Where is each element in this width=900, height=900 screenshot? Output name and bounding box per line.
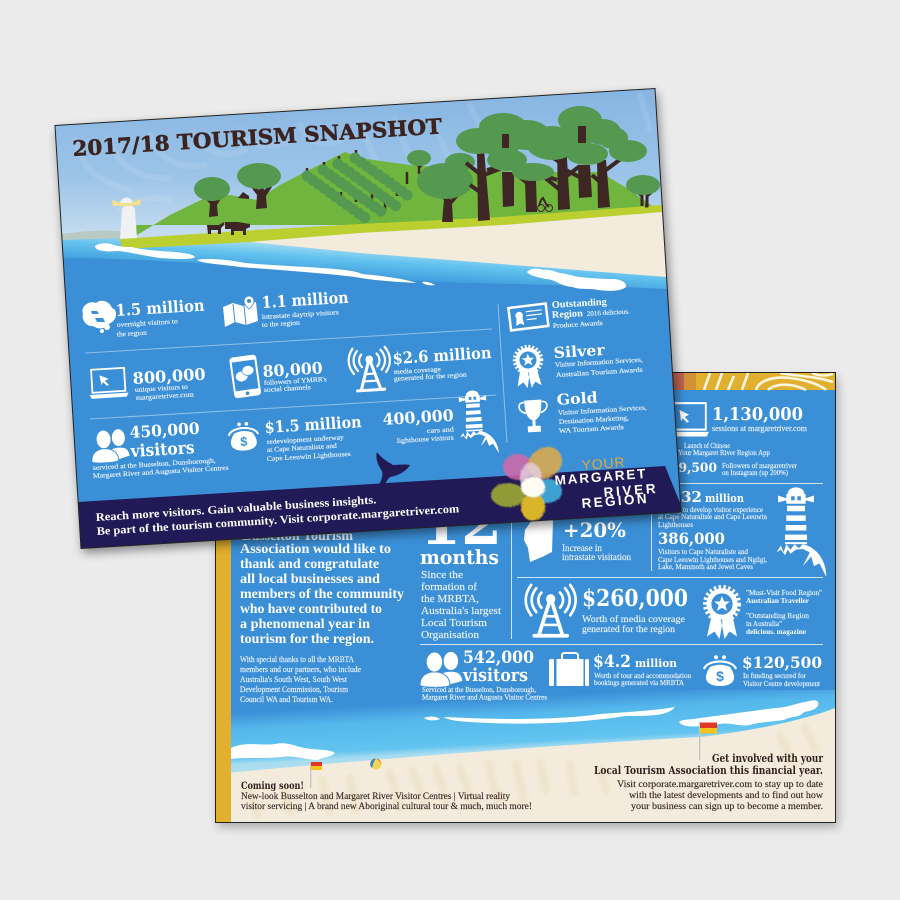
illustration: hill trees: [194, 150, 660, 222]
text: Chinese app launch: Launch of Chinese: [684, 441, 731, 450]
stat: $2.6 million: generated for the region: [394, 372, 468, 383]
stat: $4.2 million: $4.2: [593, 652, 631, 672]
award: outstanding region: Produce Awards: [553, 320, 603, 330]
foam: [197, 259, 435, 285]
gold side stripe: [216, 540, 231, 822]
icon: lighthouse: [777, 487, 826, 577]
icon: right flag: [699, 722, 717, 760]
stat: $2.6 million: media coverage: [394, 366, 441, 376]
grass strip: [120, 205, 663, 249]
text: special thanks: Australia's South West, South West: [240, 675, 348, 684]
stat: lighthouse investment: million: [705, 491, 745, 505]
stat: 1.5 million: overnight visitors to: [117, 318, 179, 329]
stat: 800,000: unique visitors to: [135, 384, 189, 394]
panel: back card: [216, 373, 835, 822]
stat: $4.2 million: [593, 652, 691, 687]
logo: wordmark: YOUR: [581, 454, 625, 473]
award: gold: [556, 388, 647, 435]
text: coming soon: New-look Busselton and Margaret River Visitor Centres | Virtual reality: [241, 792, 510, 802]
stat: 12 months: 12: [420, 485, 502, 560]
gold textured top band: [673, 373, 835, 392]
dividers: [85, 304, 507, 443]
stat: lighthouse investment: [655, 488, 767, 529]
stat: $260,000: generated for the region: [582, 624, 675, 635]
shallow water: [60, 238, 667, 289]
award: silver: Visitor Information Services,: [555, 357, 643, 369]
distant headland: [62, 230, 120, 240]
stat: 542,000 visitors: [422, 648, 547, 702]
stat: +20%: [562, 522, 631, 560]
icon: laptop: [674, 402, 709, 436]
award: outstanding region: Region: [552, 308, 584, 321]
heading: thank you message: members of the community: [240, 587, 404, 602]
illustration: vineyard: [307, 150, 410, 220]
award: silver: Australian Tourism Awards: [556, 367, 643, 379]
stat: 542,000 visitors: visitors: [462, 665, 528, 686]
text: media quotes: "Outstanding Region: [746, 611, 809, 620]
stat: $120,500: $120,500: [742, 653, 822, 672]
beach: [250, 212, 667, 277]
stat: 80,000: [262, 358, 327, 394]
stat: $4.2 million: bookings generated via MRBTA: [594, 679, 684, 687]
text: get involved: Visit corporate.margaretriver.com to stay up to date: [617, 780, 823, 790]
icon: certificate: [507, 302, 550, 332]
stat: 1.1 million: 1.1 million: [261, 288, 349, 312]
icon: beach ball: [370, 758, 382, 770]
text: media quotes: "Must-Visit Food Region": [746, 588, 822, 597]
stat: $1.5 million: at Cape Naturaliste and: [267, 443, 338, 454]
award: outstanding region: 2016 delicious.: [587, 308, 630, 318]
logo: wordmark: MARGARET: [554, 466, 647, 488]
heading: thank you message: a phenomenal year in: [240, 617, 370, 632]
stat: 12 months: Organisation: [421, 629, 480, 641]
stat: 400,000: 400,000: [382, 406, 454, 429]
heading: thank you message: all local businesses and: [240, 572, 380, 587]
icon: cloud with cars: [82, 301, 116, 333]
stat: 800,000: [132, 365, 206, 402]
stat: $120,500: Visitor Centre development: [743, 680, 820, 688]
text: media quotes: Australian Traveller: [746, 596, 810, 605]
icon: map pin: [223, 296, 258, 327]
icon: suitcase: [549, 653, 589, 686]
stat: 12 months: Local Tourism: [421, 617, 487, 629]
stat: $1.5 million: Cape Leeuwin Lighthouses: [267, 451, 351, 463]
stat: +20%: Increase in: [562, 544, 602, 554]
stat: lighthouse investment: $1.32: [655, 488, 702, 506]
stat: 12 months: [420, 524, 501, 641]
stat: 542,000 visitors: Serviced at the Busselton, Dunsborough,: [422, 686, 536, 694]
stat: 12 months: months: [420, 545, 499, 569]
stat: 450,000 visitors: serviced at the Busselton, Dunsborough,: [93, 457, 216, 472]
text: special thanks: members and our partners, who include: [240, 665, 361, 674]
panel: front card: [55, 88, 690, 560]
stat: 542,000 visitors: Margaret River and Augusta Visitor Centres: [422, 694, 547, 702]
stat: 12 months: Since the: [421, 569, 463, 581]
stat: 80,000: followers of YMRR's: [264, 376, 327, 387]
icon: smartphone: [229, 354, 261, 399]
stat: 1.5 million: 1.5 million: [115, 296, 205, 320]
stat: 400,000: [382, 406, 455, 445]
stat: 1.1 million: to the region: [262, 320, 301, 329]
text: get involved: Local Tourism Association this financial year.: [594, 764, 823, 777]
stat: 1.5 million: [115, 296, 205, 338]
illustration: cyclist: [538, 198, 552, 212]
card shadow: back: [218, 378, 838, 827]
stat: 12 months: the MRBTA,: [421, 593, 479, 605]
icon: whale tail: [376, 452, 410, 486]
stat: 450,000 visitors: 450,000: [129, 419, 200, 442]
stat: 800,000: margaretriver.com: [136, 391, 195, 402]
icon: trophy: [519, 399, 549, 433]
heading: thank you message: Busselton Tourism: [242, 529, 353, 544]
stat: $260,000: Worth of media coverage: [582, 614, 685, 625]
heading: thank you message: who have contributed to: [240, 602, 382, 617]
stat: 1.1 million: [261, 288, 349, 329]
text: media quotes: [746, 588, 822, 636]
logo: wordmark: REGION: [581, 491, 647, 511]
stat: 80,000: 80,000: [262, 358, 323, 381]
icon: award rosette: [705, 587, 739, 639]
award: outstanding region: Outstanding: [552, 297, 607, 311]
stat: lighthouse investment: Lighthouses: [658, 520, 693, 529]
stat: Instagram followers: [679, 462, 797, 477]
text: media quotes: in Australia": [746, 619, 782, 628]
foam: left: [231, 743, 335, 760]
heading: thank you message: [240, 529, 404, 647]
award: silver: Silver: [553, 341, 606, 362]
foam: [95, 243, 195, 259]
stat: $1.5 million: redevelopment underway: [267, 434, 345, 446]
stat: Instagram followers: 49,500: [670, 461, 717, 476]
blue background: [231, 390, 835, 690]
stat: 400,000: lighthouse visitors: [397, 435, 454, 445]
stat: lighthouse investment: Funding to develop visitor experience: [658, 505, 764, 514]
illustration: cows: [207, 222, 250, 235]
icon: visitors: [420, 652, 462, 687]
stat: $1.5 million: [264, 412, 362, 463]
stat: lighthouse investment: at Cape Naturaliste and Cape Leeuwin: [658, 512, 767, 521]
stat: 1.1 million: intrastate daytrip visitors: [262, 309, 339, 321]
foam: thin centre: [424, 707, 675, 724]
icon: Western Australia map: [524, 520, 553, 562]
heading: thank you message: Association would like to: [240, 542, 391, 557]
text: get involved: with the latest developments and to find out how: [629, 790, 823, 801]
stat: $260,000: [582, 585, 688, 635]
award: outstanding region: [552, 297, 630, 330]
text: get involved: [594, 752, 823, 812]
text: coming soon: visitor servicing | A brand new Aboriginal cultural tour & much, much more!: [241, 802, 532, 812]
stat: $120,500: [743, 656, 822, 688]
text: get involved: your business can sign up to become a member.: [631, 802, 823, 812]
text: special thanks: Development Commission, Tourism: [240, 685, 349, 694]
stat: 1,130,000 sessions: sessions at margaretriver.com: [712, 424, 808, 433]
stat: 542,000 visitors: 542,000: [463, 648, 534, 668]
stat: 450,000 visitors: Margaret River and Augusta Visitor Centres: [93, 465, 229, 480]
stat: Instagram followers: Followers of margaretriver: [722, 461, 797, 470]
stat: $1.5 million: $1.5 million: [264, 412, 362, 437]
text: get involved: Get involved with your: [712, 752, 823, 765]
award: gold: Destination Marketing,: [559, 415, 629, 426]
stat: 80,000: social channels: [264, 384, 311, 394]
icon: laptop front: [88, 368, 129, 399]
stat: $260,000: $260,000: [582, 585, 688, 612]
sand: [216, 708, 835, 822]
stat: 12 months: formation of: [421, 581, 477, 593]
icon: lighthouse front: [457, 389, 499, 455]
stat: +20%: intrastate visitation: [562, 553, 631, 563]
text: special thanks: [240, 655, 361, 704]
stat: 12 months: Australia's largest: [421, 605, 501, 617]
stat: $2.6 million: [392, 343, 492, 383]
logo: paint blobs: [491, 440, 568, 521]
logo: wordmark: [554, 454, 656, 511]
award: gold: Visitor Information Services,: [558, 405, 647, 417]
stat: Instagram followers: on Instagram (up 200%): [722, 468, 788, 477]
icon: silver rosette: [514, 346, 543, 389]
stat: 450,000 visitors: [93, 419, 229, 480]
stat: $2.6 million: $2.6 million: [392, 343, 492, 368]
stat: 386,000 visitors: Visitors to Cape Naturaliste and: [658, 547, 748, 556]
stat: 400,000: cars and: [427, 426, 455, 435]
card shadow: front: [57, 93, 685, 553]
sky: [55, 88, 668, 250]
text: special thanks: With special thanks to all the MRBTA: [240, 655, 354, 664]
heading: thank you message: thank and congratulate: [240, 557, 379, 572]
stat: 1.5 million: the region: [117, 330, 148, 338]
sea: [231, 690, 835, 772]
award: gold: Gold: [556, 388, 599, 409]
text: Chinese app launch: [678, 441, 770, 457]
text: Chinese app launch: Your Margaret River Region App: [678, 448, 770, 457]
text: special thanks: Council WA and Tourism WA.: [240, 695, 333, 704]
text: media quotes: delicious. magazine: [746, 627, 807, 636]
stat: $4.2 million: Worth of tour and accommodation: [594, 672, 691, 680]
icon: visitors front: [90, 429, 130, 464]
foam: [527, 269, 626, 291]
icon: money purse front: [228, 421, 259, 451]
stat: 386,000 visitors: Cape Leeuwin Lighthouses and Ngilgi,: [658, 555, 767, 564]
stat: 1,130,000 sessions: 1,130,000: [712, 404, 803, 425]
stat: $4.2 million: million: [635, 656, 678, 670]
illustration: forest: [456, 106, 647, 221]
stat: +20%: +20%: [563, 518, 626, 542]
stat: 450,000 visitors: visitors: [129, 438, 195, 462]
icon: radio tower: [526, 585, 576, 636]
deep sea: [64, 258, 680, 502]
foam: right: [679, 700, 818, 726]
award: silver: [553, 341, 643, 379]
icon: left flag: [310, 762, 322, 788]
text: footer call to action: Reach more visitors. Gain valuable business insights.: [95, 494, 377, 524]
logo: wordmark: RIVER: [603, 481, 656, 500]
stat: 386,000 visitors: Lake, Mammoth and Jewel Caves: [658, 562, 753, 571]
text: coming soon: Coming soon!: [241, 781, 304, 792]
stat: 386,000 visitors: [658, 532, 767, 570]
icon: money purse: [704, 655, 736, 686]
text: footer call to action: Be part of the tourism community. Visit corporate.margaretriver.com: [96, 503, 460, 538]
illustration: lighthouse: [112, 198, 141, 239]
navy footer strip: [78, 466, 685, 552]
title: 2017/18 TOURISM SNAPSHOT: [72, 113, 443, 161]
hills: [130, 152, 660, 235]
stat: $120,500: In funding secured for: [743, 672, 807, 680]
text: coming soon: [241, 781, 532, 812]
heading: thank you message: tourism for the region.: [240, 632, 374, 647]
award: gold: WA Tourism Awards: [559, 424, 624, 435]
stat: 386,000 visitors: 386,000: [658, 529, 725, 548]
icon: radio tower front: [348, 347, 392, 391]
stat: 800,000: 800,000: [132, 365, 206, 388]
